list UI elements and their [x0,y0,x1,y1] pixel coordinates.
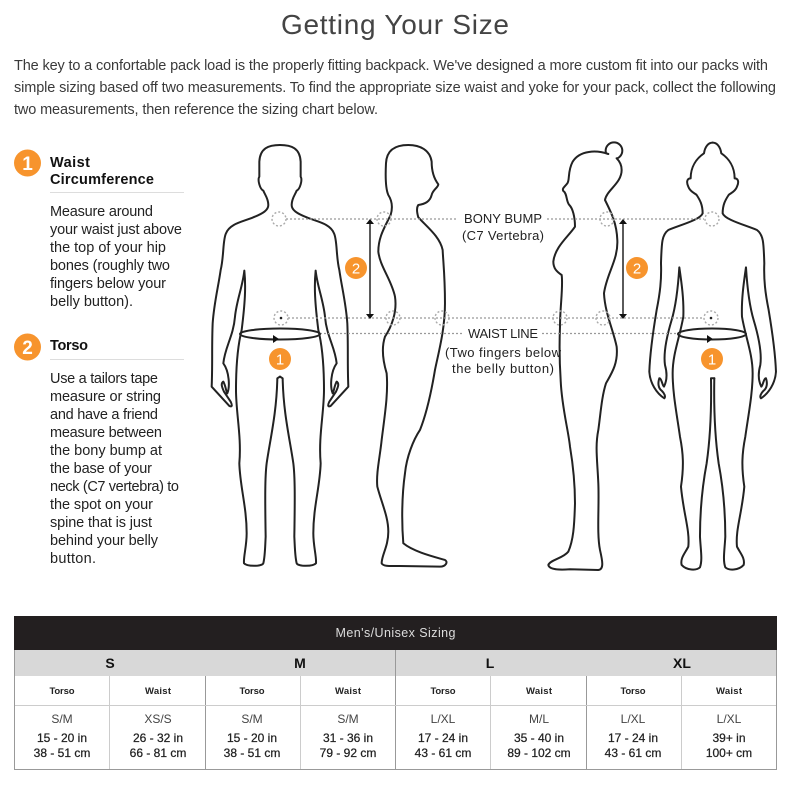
figure: man side view [377,145,447,567]
arrow: torso measure, female [619,219,627,319]
size S values: 15 - 20 in [37,731,87,745]
size XL values: L/XL [621,712,646,726]
waist markers [274,311,718,325]
bony bump markers [272,212,719,226]
icon: badge 2, female: 2 [633,260,641,278]
size L values [415,712,571,760]
label: bony bump: BONY BUMP [464,211,542,226]
column labels: Waist [526,686,553,697]
size M values: S/M [241,712,263,726]
icon: number 2 badge [14,334,41,360]
size M values: 38 - 51 cm [224,746,280,760]
size M values: 79 - 92 cm [320,746,376,760]
icon: badge 1, female [701,348,723,370]
icon: badge 1, male [269,348,291,370]
icon: badge 1, female: 1 [708,352,716,368]
text: torso instructions: behind your belly [50,533,159,549]
icon: badge 2, female [626,257,648,279]
text: torso instructions: button. [50,551,96,567]
column labels: Torso [50,686,75,697]
waist loop, male [240,328,320,343]
text: torso instructions: and have a friend [50,407,158,423]
size S values: 38 - 51 cm [34,746,90,760]
column labels: Waist [335,686,362,697]
size S values: XS/S [144,712,172,726]
icon: badge 2, male [345,257,367,279]
text: waist instructions: fingers below your [50,276,166,292]
text: torso instructions: the base of your [50,461,152,477]
text: waist instructions: bones (roughly two [50,258,170,274]
column labels: Torso [240,686,265,697]
table header: Men's/Unisex Sizing: Men's/Unisex Sizing [336,626,456,640]
size L values: 35 - 40 in [514,731,564,745]
size row: L [486,655,495,671]
heading: waist circumference: Circumference [50,172,154,188]
size S values: S/M [51,712,73,726]
text: torso instructions: spine that is just [50,515,152,531]
text: torso instructions: measure or string [50,389,161,405]
intro paragraph: two measurements, then reference the sizing chart below. [14,102,378,118]
waist loop, female [678,328,746,343]
size XL values: 43 - 61 cm [605,746,661,760]
text: torso instructions [50,371,179,567]
size L values: 89 - 102 cm [507,746,571,760]
size M values: 15 - 20 in [227,731,277,745]
column labels: Waist [716,686,743,697]
size XL values: 17 - 24 in [608,731,658,745]
dotted guide lines [286,219,704,334]
icon: number 1 badge [14,150,41,176]
label: waist line: (Two fingers below [445,345,562,360]
text: waist instructions [50,204,182,310]
intro paragraph: simple sizing based off two measurements. To find the appropriate size waist and yoke for your pack, collect the following [14,80,776,96]
figure: woman side view [548,142,622,570]
size L values: 17 - 24 in [418,731,468,745]
size XL values [605,712,752,760]
heading: torso: Torso [50,338,88,354]
panel: waist circumference instructions [14,150,184,310]
column labels: Waist [145,686,172,697]
sizing table [14,616,777,770]
size L values: M/L [529,712,549,726]
label: waist line [445,326,562,376]
size XL values: 39+ in [712,731,746,745]
size XL values: 100+ cm [706,746,752,760]
arrow: torso measure, male [366,219,374,319]
size M values: S/M [337,712,359,726]
body measurement diagram [212,142,776,570]
label: bony bump: (C7 Vertebra) [462,228,544,243]
icon: number 2 badge: 2 [22,338,33,359]
label: bony bump [458,210,546,244]
text: waist instructions: the top of your hip [50,240,166,256]
text: torso instructions: the bony bump at [50,443,162,459]
title: Getting Your Size [281,9,509,40]
column labels: Torso [620,686,646,697]
intro paragraph [14,58,776,118]
size M values [224,712,376,760]
size row: XL [673,655,691,671]
text: torso instructions: Use a tailors tape [50,371,158,387]
table header: Men's/Unisex Sizing [14,616,777,650]
size XL values: L/XL [717,712,742,726]
text: waist instructions: belly button). [50,294,133,310]
table grid lines [14,650,776,770]
text: waist instructions: your waist just above [50,222,182,238]
icon: number 1 badge: 1 [22,154,33,175]
text: torso instructions: neck (C7 vertebra) to [50,479,179,495]
figure: woman front view [649,143,776,570]
size S values [34,712,186,760]
size row: M [294,655,306,671]
text: waist instructions: Measure around [50,204,153,220]
label: waist line: the belly button) [452,361,554,376]
size row [14,650,777,676]
size S values: 66 - 81 cm [130,746,186,760]
figure: man front view [212,145,348,566]
heading: waist circumference: Waist [50,155,90,171]
label: waist line: WAIST LINE [468,326,538,341]
text: torso instructions: measure between [50,425,162,441]
intro paragraph: The key to a confortable pack load is the properly fitting backpack. We've designed a more custom fit into our packs with [14,58,768,74]
size L values: L/XL [431,712,456,726]
text: torso instructions: the spot on your [50,497,153,513]
size M values: 31 - 36 in [323,731,373,745]
heading: waist circumference [50,155,154,188]
size S values: 26 - 32 in [133,731,183,745]
size row: S [105,655,115,671]
column labels [50,686,743,697]
size L values: 43 - 61 cm [415,746,471,760]
icon: badge 1, male: 1 [276,352,284,368]
panel: torso instructions [14,334,184,567]
column labels: Torso [430,686,456,697]
icon: badge 2, male: 2 [352,260,360,278]
